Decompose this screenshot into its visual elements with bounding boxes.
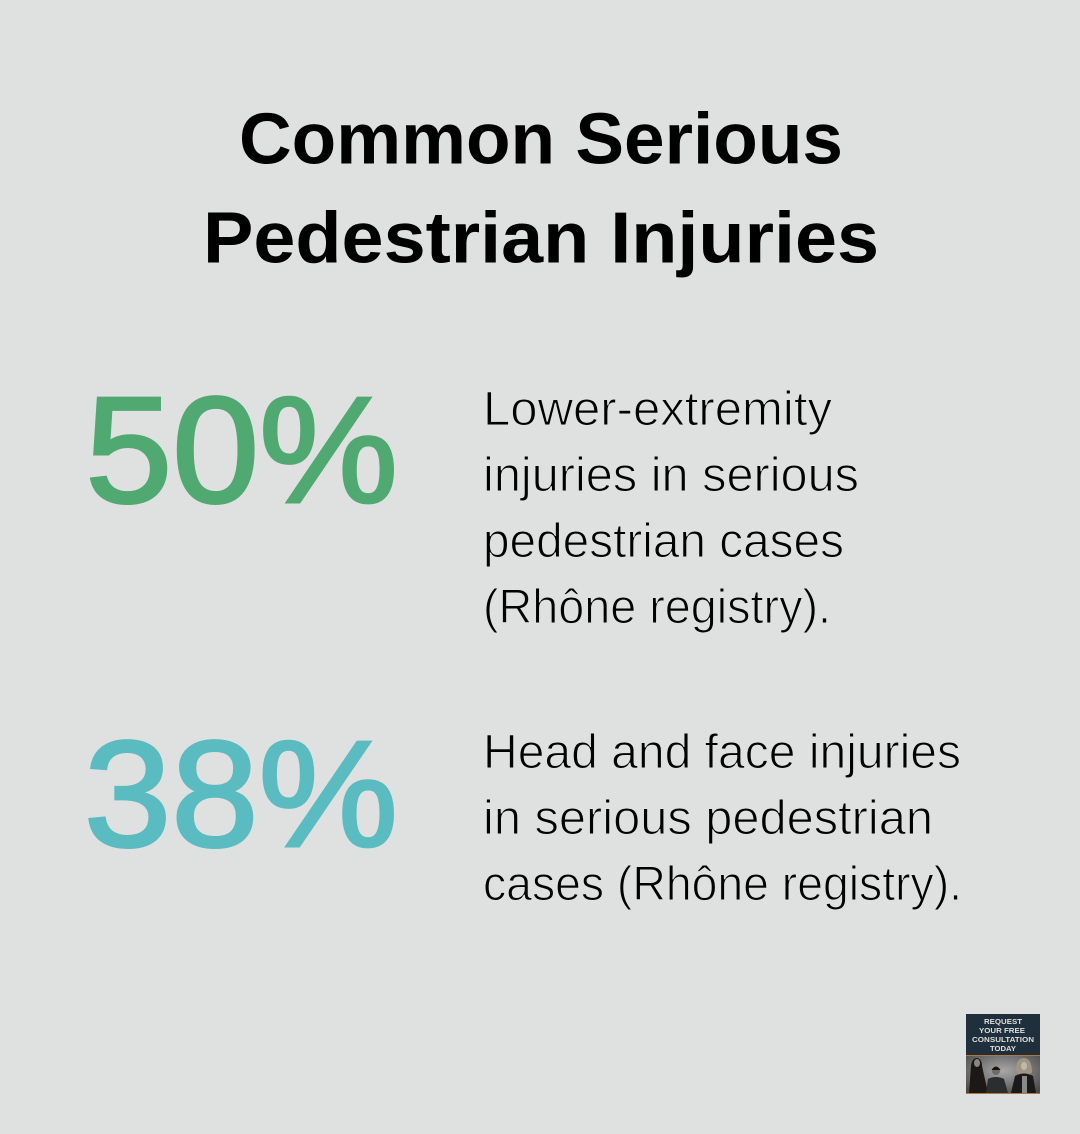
text block: head and face injuries: cases (Rhône registry).	[483, 858, 962, 911]
text block: lower-extremity injuries: injuries in serious	[483, 449, 859, 502]
icon: three people photo	[969, 1058, 1036, 1093]
text block: head and face injuries	[483, 726, 962, 911]
stat: 50 percent: 50%	[85, 365, 398, 534]
stat: 38 percent: 38%	[84, 709, 398, 878]
badge: request your free consultation: YOUR FREE	[979, 1026, 1025, 1035]
badge: request your free consultation: CONSULTATION	[972, 1035, 1034, 1044]
title: Pedestrian Injuries	[203, 198, 879, 278]
title	[203, 100, 879, 278]
text block: head and face injuries: Head and face injuries	[483, 726, 961, 779]
badge: request your free consultation: REQUEST	[984, 1017, 1022, 1026]
badge: request your free consultation	[966, 1014, 1040, 1094]
text block: lower-extremity injuries: pedestrian cases	[483, 515, 844, 568]
title: Common Serious	[239, 100, 843, 180]
text block: lower-extremity injuries: Lower-extremity	[483, 383, 832, 436]
badge: request your free consultation: TODAY	[990, 1044, 1016, 1053]
text block: head and face injuries: in serious pedestrian	[483, 792, 933, 845]
text block: lower-extremity injuries: (Rhône registry).	[483, 581, 831, 634]
text block: lower-extremity injuries	[483, 383, 859, 634]
